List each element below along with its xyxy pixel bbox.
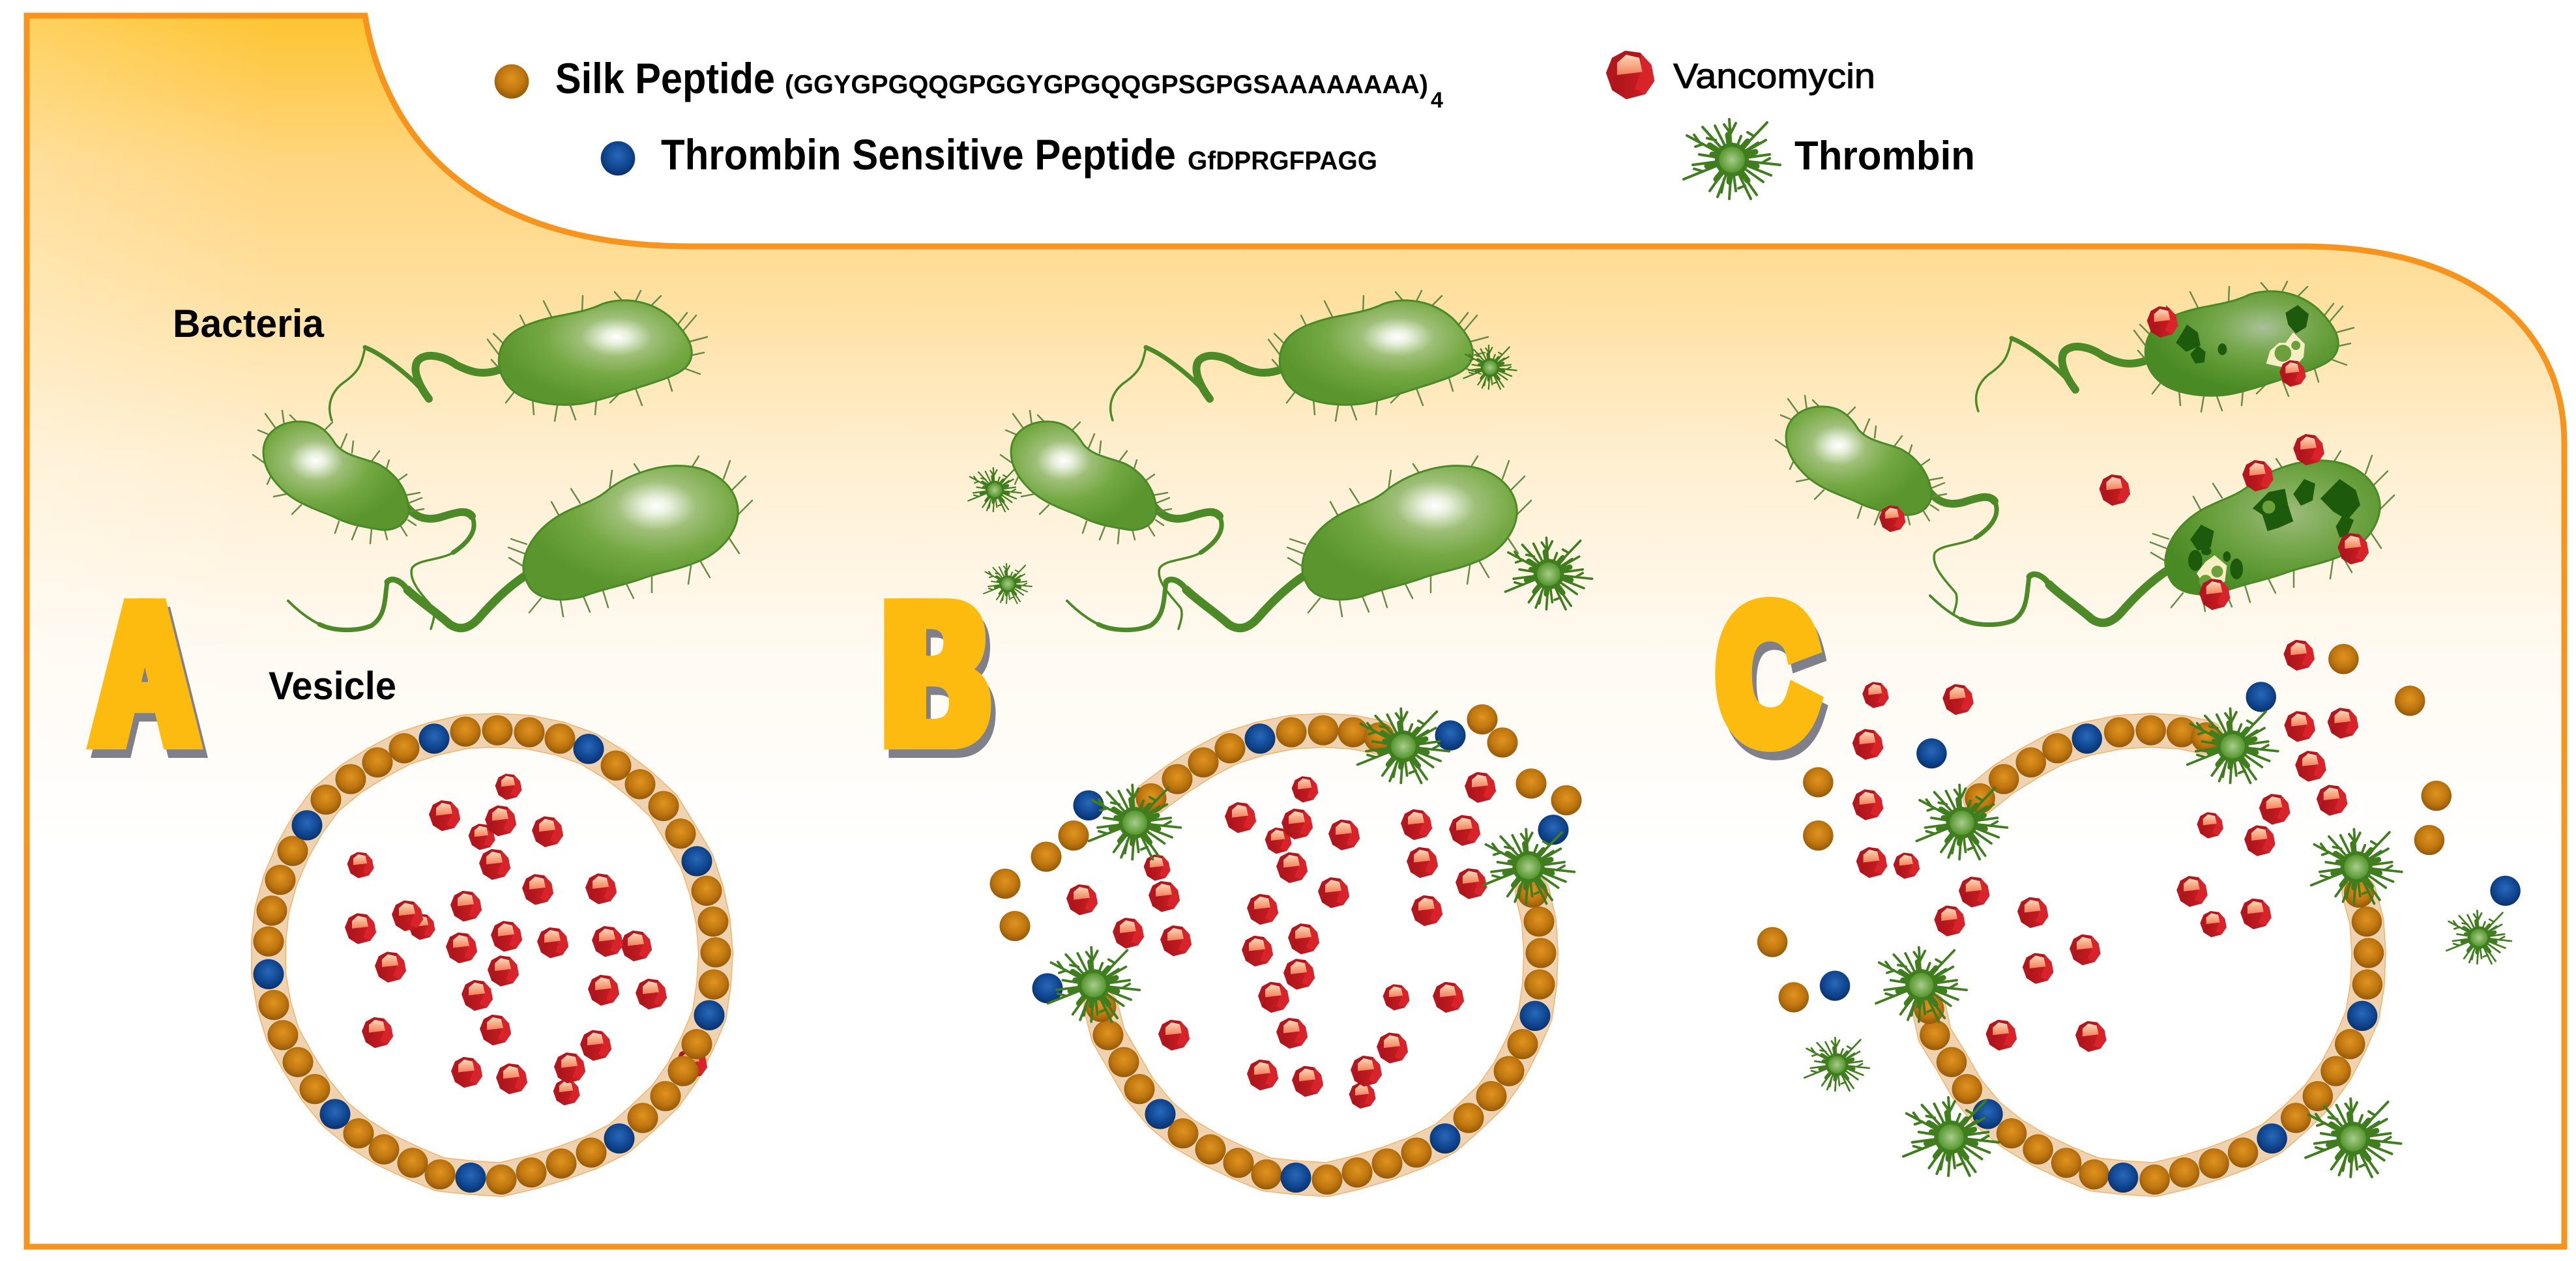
membrane halo	[1929, 731, 2369, 1180]
membrane halo	[269, 731, 716, 1180]
vancomycin on bacteria	[1879, 306, 2369, 610]
letter A: A	[91, 566, 194, 798]
legend sequence: silk peptide: (GGYGPGQQGPGGYGPGQQGPSGPGSAAAAAAAA)	[785, 70, 1428, 99]
free thrombin	[984, 564, 1032, 603]
letter B: B	[898, 567, 999, 798]
bacterium C lower with damage	[1930, 451, 2394, 625]
bacterium B top	[1111, 291, 1488, 421]
bacterium A lower	[288, 456, 752, 630]
panel C: damaged bacteria	[1776, 282, 2394, 625]
legend	[495, 51, 1975, 199]
thrombin cleaving membrane	[1048, 708, 1574, 1022]
bacterium B lower	[1067, 456, 1531, 630]
thrombin sensitive peptide beads	[253, 723, 725, 1193]
panel B: vesicle opening under thrombin	[989, 704, 1581, 1195]
panel A: intact vesicle	[253, 715, 731, 1195]
letter A: A	[100, 558, 203, 789]
silk peptide beads	[989, 704, 1581, 1195]
letter A: A	[87, 558, 190, 789]
panel C: vesicle releasing cargo	[1757, 640, 2521, 1195]
membrane halo	[1101, 731, 1541, 1180]
bacterium C left	[1776, 396, 1997, 614]
legend label: thrombin sensitive peptide: Thrombin Sensitive Peptide	[661, 130, 1176, 179]
silk peptide beads	[253, 715, 731, 1195]
legend sequence: thrombin sensitive peptide: GfDPRGFPAGG	[1188, 147, 1377, 175]
subscript 4: 4	[1431, 88, 1443, 113]
letter C: C	[1723, 579, 1821, 787]
bacterium C top with damage	[1976, 282, 2354, 412]
legend label: vancomycin: Vancomycin	[1673, 57, 1875, 96]
legend label: thrombin: Thrombin	[1794, 134, 1975, 179]
icon: silk peptide bead	[495, 65, 529, 98]
released vancomycin	[1852, 640, 2358, 1052]
letter C: C	[1718, 570, 1816, 778]
icon: vancomycin	[1606, 51, 1654, 99]
panel B: bacteria with thrombin	[968, 291, 1592, 630]
heading: Vesicle: Vesicle	[269, 664, 396, 708]
silk peptide beads	[1757, 644, 2452, 1195]
thrombin sensitive peptide beads	[1032, 720, 1568, 1193]
thrombin on left bacterium	[968, 468, 1021, 512]
thrombin sensitive peptide beads	[1820, 682, 2521, 1193]
thrombin on lower bacterium	[1505, 538, 1592, 609]
icon: thrombin sensitive peptide bead	[601, 141, 635, 175]
bacterium B left	[1001, 411, 1222, 629]
letter B: B	[894, 558, 995, 790]
heading: Bacteria: Bacteria	[173, 302, 325, 345]
thrombin molecules	[1804, 708, 2511, 1177]
bacterium A left	[253, 411, 474, 629]
bacterium A top	[330, 291, 707, 421]
letter B: B	[877, 558, 978, 790]
legend label: silk peptide: Silk Peptide	[555, 54, 775, 102]
panel A: bacteria	[253, 291, 752, 630]
thrombin on top bacterium	[1463, 345, 1517, 389]
letter B: B	[883, 567, 983, 798]
icon: thrombin	[1684, 119, 1780, 199]
letter A: A	[104, 566, 207, 798]
vancomycin escaping	[1066, 772, 1496, 1109]
vancomycin cargo	[345, 774, 707, 1105]
